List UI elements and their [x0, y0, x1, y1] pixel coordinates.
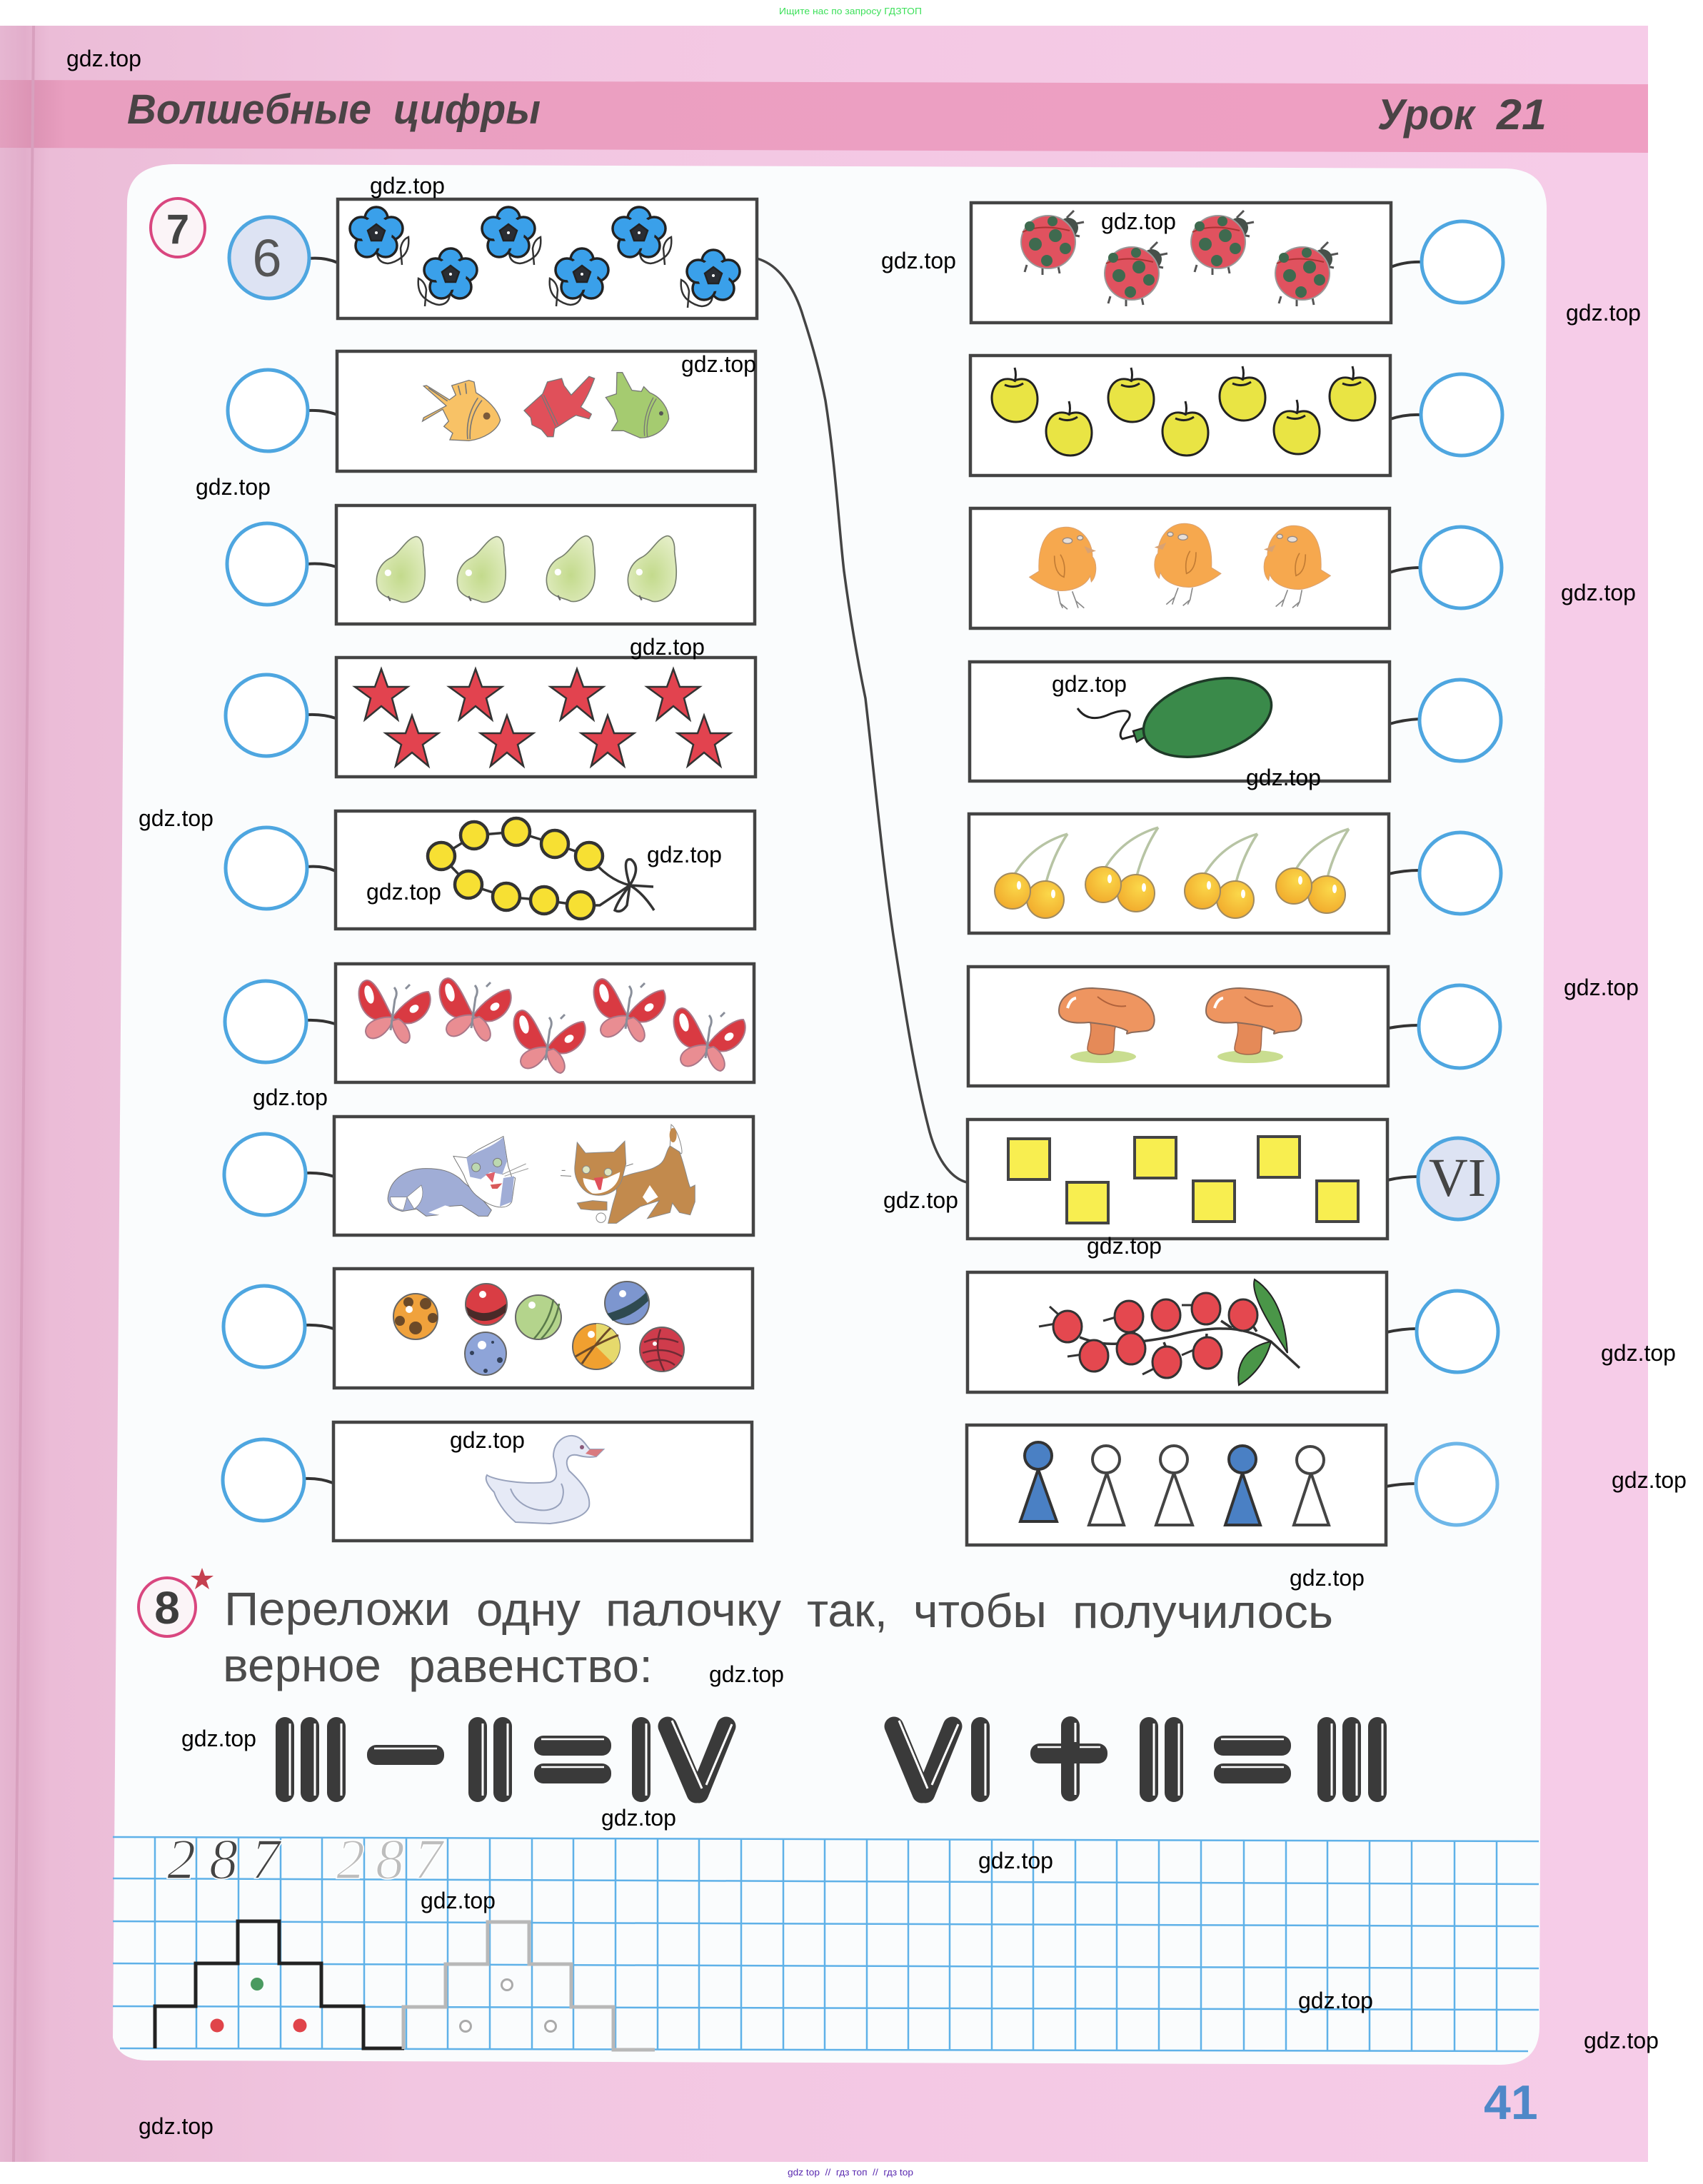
watermarks: gdz.top: [253, 1085, 328, 1110]
instruction text: равенство:: [408, 1639, 653, 1692]
watermarks: gdz.top: [1246, 765, 1321, 790]
heading: Урок 21: Урок: [1377, 91, 1476, 139]
row: pawns: [967, 1425, 1497, 1545]
badge: task 8 with star: [139, 1568, 213, 1636]
instruction text: Переложи: [224, 1582, 451, 1635]
icon: two mushrooms: [1059, 988, 1302, 1063]
watermarks: gdz.top: [647, 842, 722, 867]
watermarks: gdz.top: [1566, 300, 1641, 326]
icon: four ladybugs: [1021, 211, 1338, 306]
handwritten digits: black sample: 2: [167, 1828, 196, 1891]
watermarks: gdz.top: [421, 1888, 496, 1913]
row: pears: [227, 505, 755, 624]
instruction text: так,: [807, 1584, 888, 1636]
watermarks: gdz.top: [450, 1427, 525, 1453]
watermarks: gdz.top: [181, 1726, 256, 1751]
white panel: [113, 164, 1547, 2065]
staircase tracing pattern: [403, 1922, 655, 2050]
icon: five pawns: [1020, 1442, 1329, 1525]
row: mushrooms: [968, 967, 1500, 1086]
handwritten digits: black sample: 8: [209, 1828, 238, 1891]
watermarks: gdz.top: [370, 173, 445, 198]
row: squares: VI: [1429, 1148, 1486, 1208]
heading band: [0, 80, 1648, 153]
handwritten digits: grey tracing: 7: [414, 1828, 445, 1891]
watermarks: gdz.top: [1052, 671, 1127, 697]
icon: six blue flowers: [350, 207, 740, 308]
icon: eight red stars: [355, 669, 730, 766]
instruction text: чтобы: [913, 1584, 1047, 1637]
row: flowers: 6: [252, 228, 282, 288]
instruction text: получилось: [1072, 1585, 1333, 1638]
row: watermelon: [970, 662, 1501, 781]
staircase sample pattern: [155, 1921, 404, 2048]
watermarks: gdz.top: [1298, 1988, 1373, 2013]
row: beads: [226, 811, 755, 929]
icon: berry branch: [1039, 1279, 1300, 1385]
heading: Волшебные цифры: [127, 86, 541, 133]
row: ladybugs: [971, 203, 1503, 323]
handwritten digits: black sample: [167, 1828, 282, 1891]
watermarks: gdz.top: [1584, 2028, 1659, 2053]
icon: six yellow squares: [1008, 1137, 1358, 1223]
icon: string of beads: [428, 818, 654, 919]
icon: seven yellow apples: [992, 366, 1375, 456]
icon: four pears: [376, 536, 676, 603]
watermarks: gdz.top: [881, 248, 956, 273]
watermarks: gdz.top: [366, 879, 441, 905]
watermarks: gdz.top: [978, 1848, 1053, 1873]
matching line from flowers to squares: [757, 258, 967, 1182]
page fold: [14, 26, 34, 2162]
row: stars: [226, 658, 755, 777]
watermarks: gdz.top: [681, 351, 756, 377]
watermarks: gdz.top: [630, 634, 705, 660]
heading: Волшебные цифры: цифры: [393, 86, 541, 133]
stick equation: III − II = IV: [276, 1717, 732, 1802]
icon: ginger kitten: [561, 1124, 695, 1223]
handwritten digits: grey tracing: 8: [376, 1828, 404, 1891]
icon: goose: [486, 1436, 603, 1524]
icon: three fish: [423, 373, 669, 441]
badge: task 8 with star: 8: [154, 1582, 180, 1634]
watermarks: gdz.top: [139, 805, 213, 831]
heading: Волшебные цифры: Волшебные: [127, 86, 371, 133]
row: balls: [223, 1269, 753, 1388]
watermarks: gdz.top: [1601, 1340, 1676, 1366]
badge: task 7: 7: [166, 206, 189, 253]
row: goose: [223, 1422, 752, 1541]
row: fish: [228, 351, 755, 471]
handwritten digits: black sample: 7: [251, 1828, 282, 1891]
squared notebook grid: [113, 1837, 1539, 2051]
instruction text: верное: [223, 1639, 381, 1691]
icon: four pairs of cherries: [995, 827, 1349, 918]
row: berries: [968, 1272, 1498, 1392]
instruction text: одну: [476, 1583, 581, 1636]
row: flowers: [229, 199, 757, 318]
handwritten digits: grey tracing: 2: [336, 1828, 365, 1891]
watermarks: gdz.top: [196, 474, 271, 500]
row: squares: [968, 1119, 1498, 1239]
stick equation: VI + II = III: [894, 1716, 1387, 1802]
watermarks: gdz.top: [1561, 580, 1636, 605]
row: cherries: [969, 814, 1501, 933]
handwritten digits: grey tracing: [336, 1828, 445, 1891]
watermarks: gdz.top: [883, 1187, 958, 1213]
watermarks: gdz.top: [1564, 975, 1639, 1000]
heading: Урок 21: 21: [1496, 91, 1547, 139]
icon: grey kitten: [388, 1137, 528, 1216]
instruction text: палочку: [606, 1583, 781, 1636]
watermarks: gdz.top: [139, 2113, 213, 2139]
badge: task 7: [151, 198, 205, 257]
bottom promo line: gdz top // гдз топ // гдз top: [788, 2167, 913, 2178]
row: butterflies: [225, 964, 754, 1082]
watermarks: gdz.top: [1101, 208, 1176, 234]
watermarks: gdz.top: [1087, 1233, 1162, 1259]
heading: Урок 21: [1377, 91, 1547, 139]
icon: five butterflies: [358, 978, 745, 1073]
watermarks: gdz.top: [601, 1805, 676, 1831]
watermarks: gdz.top: [1612, 1467, 1687, 1493]
row: apples: [970, 356, 1502, 475]
page number: 41: [1484, 2075, 1538, 2130]
watermarks: gdz.top: [66, 46, 141, 71]
icon: three chicks: [1030, 523, 1330, 609]
watermarks: gdz.top: [1290, 1565, 1365, 1591]
watermarks: gdz.top: [709, 1661, 784, 1687]
instruction text: [223, 1582, 1333, 1692]
icon: seven balls: [393, 1282, 684, 1375]
top promo line: Ищите нас по запросу ГДЗТОП: [779, 6, 922, 16]
row: chicks: [970, 508, 1502, 628]
row: kittens: [224, 1117, 753, 1235]
icon: watermelon: [1077, 665, 1280, 770]
